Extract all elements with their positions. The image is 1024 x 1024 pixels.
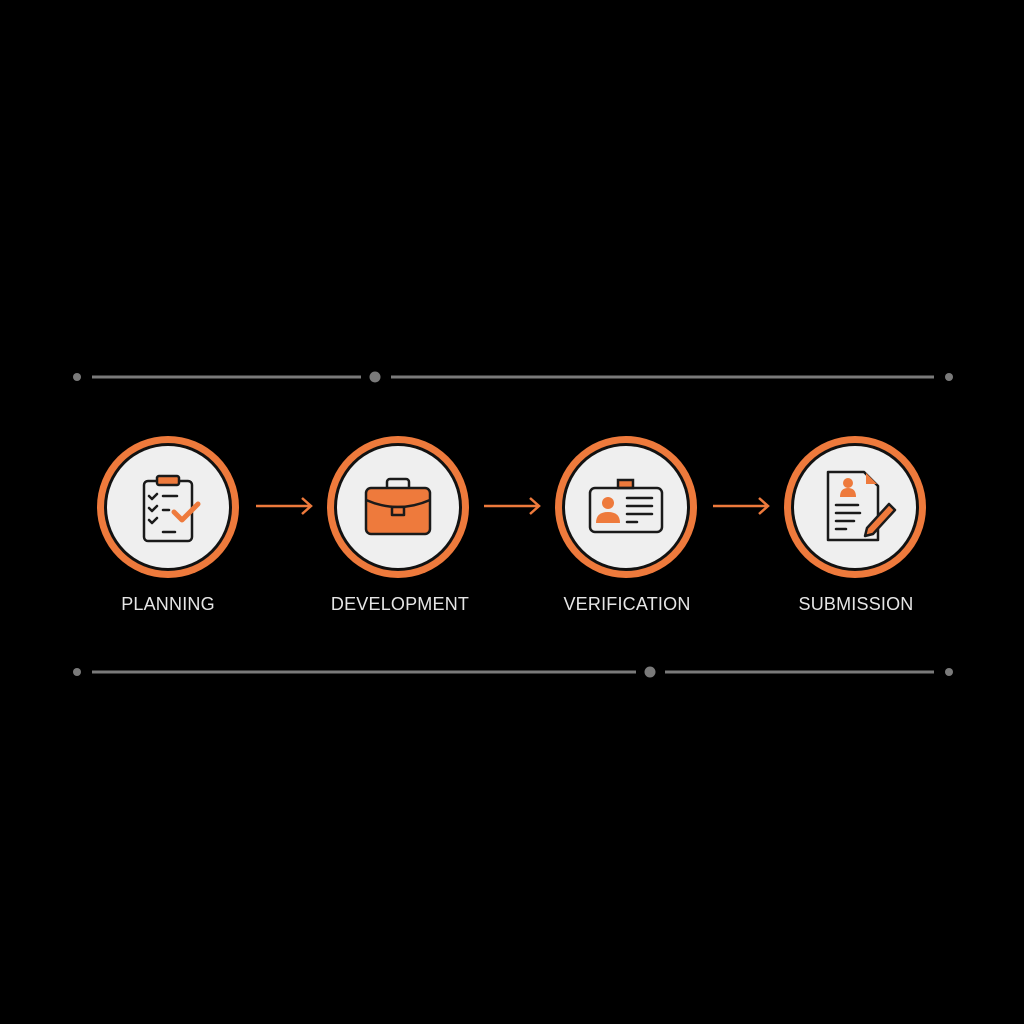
arrow 2 [484,498,539,514]
label: planning: PLANNING [121,594,215,614]
top timeline rule [73,372,953,382]
icon: id card [590,480,662,532]
step 4 circle: submission [784,436,926,578]
step 3 circle: verification [555,436,697,578]
icon: briefcase [366,479,430,534]
arrow 1 [256,498,311,514]
label: submission: SUBMISSION [798,594,914,614]
bottom timeline rule [73,666,953,678]
label: verification: VERIFICATION [563,594,691,614]
step 2 circle: development [327,436,469,578]
icon: clipboard [144,476,198,541]
icon: document with pen [828,472,895,540]
arrow 3 [713,498,768,514]
step 1 circle: planning [97,436,239,578]
label: development: DEVELOPMENT [331,594,469,614]
